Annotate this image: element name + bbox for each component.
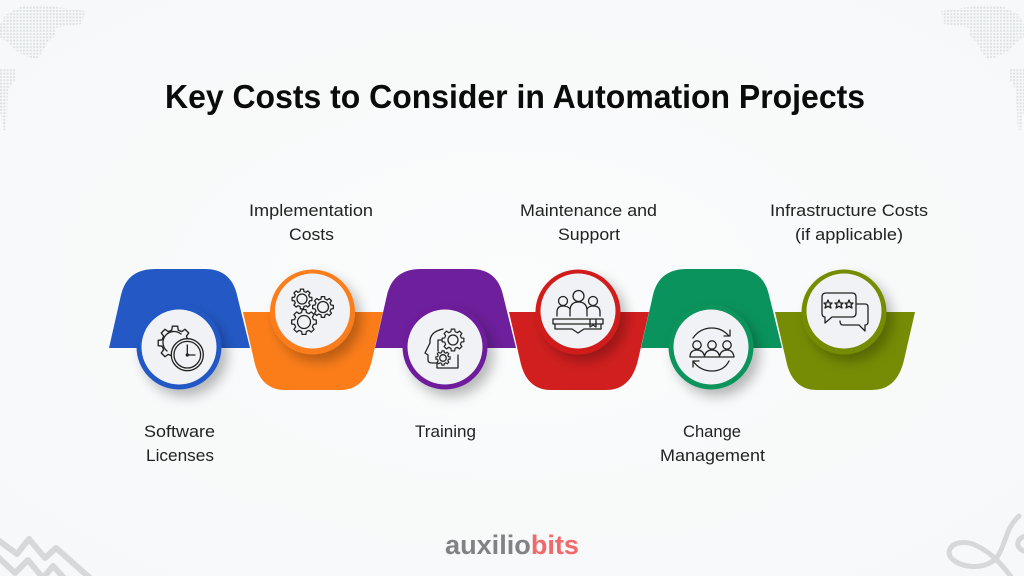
label: software licenses: Software [144, 422, 215, 441]
label: maintenance and support: Support [558, 225, 620, 244]
label: infrastructure costs: Infrastructure Costs [770, 201, 928, 220]
title: Key Costs to Consider in Automation Projects [165, 78, 865, 115]
circle: implementation costs [270, 270, 355, 354]
shape: red trapezoid [509, 312, 649, 390]
circle: software licenses [136, 304, 222, 390]
label: software licenses [144, 422, 215, 465]
icon: people and book [553, 290, 603, 333]
logo: auxiliobits [445, 530, 579, 560]
label: maintenance and support [520, 201, 657, 244]
label: change management: Management [660, 446, 765, 465]
circle: maintenance and support [536, 270, 620, 354]
circle: infrastructure costs [802, 270, 886, 354]
icon: head with gears [425, 329, 464, 368]
decoration: loop bottom right [949, 516, 1024, 576]
decoration: dotted map top right [941, 5, 1024, 130]
icon: gear and clock [158, 326, 203, 371]
label: infrastructure costs: (if applicable) [795, 225, 903, 244]
label: implementation costs: Costs [289, 225, 334, 244]
label: implementation costs: Implementation [249, 201, 373, 220]
label: training: Training [415, 422, 476, 441]
decoration: dotted map top left [0, 5, 85, 130]
label: maintenance and support: Maintenance and [520, 201, 657, 220]
circle: training [402, 304, 488, 390]
shape: olive trapezoid [775, 312, 915, 390]
label: change management: Change [683, 422, 741, 441]
shape: green trapezoid [641, 269, 782, 348]
icon: chat bubbles with stars [822, 293, 868, 331]
circle: change management [668, 304, 754, 390]
label: software licenses: Licenses [146, 446, 214, 465]
shape: purple trapezoid [375, 269, 516, 348]
shape: blue trapezoid [109, 269, 250, 348]
icon: people with cycle arrows [690, 328, 734, 371]
label: implementation costs [249, 201, 373, 244]
label: infrastructure costs [770, 201, 928, 244]
shape: orange trapezoid [243, 312, 383, 390]
decoration: zigzag bottom left [0, 539, 90, 576]
label: change management [660, 422, 765, 465]
icon: three gears [292, 289, 333, 334]
